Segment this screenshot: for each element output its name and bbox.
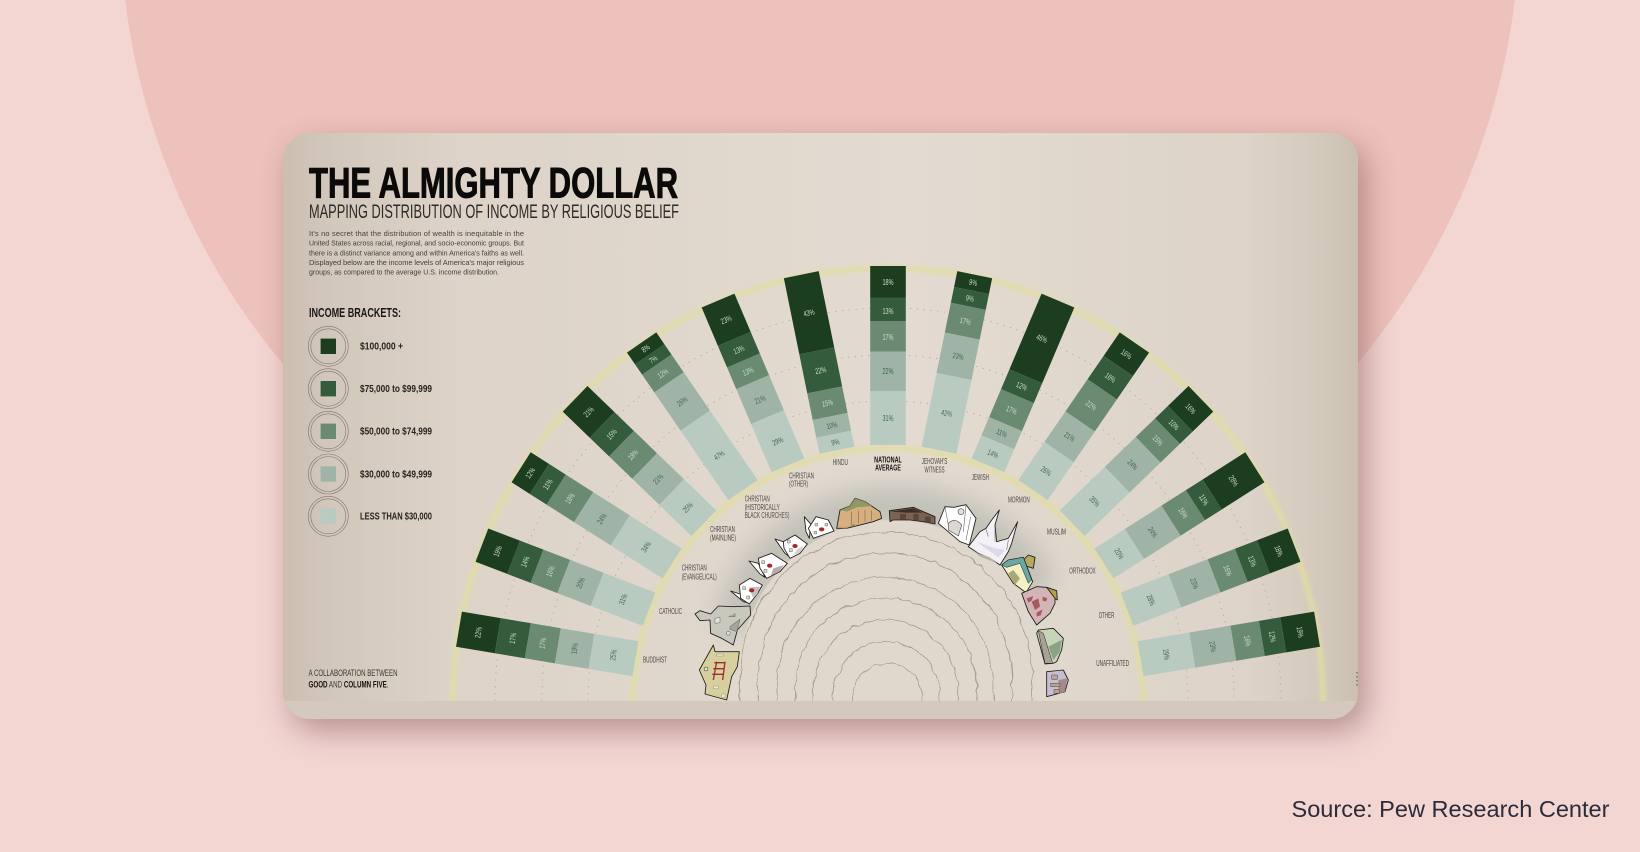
small edge marks	[1356, 672, 1358, 686]
bar: Catholic: 19%	[492, 545, 504, 558]
icon: mosque	[1002, 555, 1035, 593]
icon: dark stone temple	[889, 507, 935, 524]
bar: Christian (Mainline): 18%	[626, 448, 640, 462]
bar: Hindu	[784, 271, 854, 454]
bar: Muslim: 24%	[1125, 458, 1140, 472]
bar: Buddhist: 17%	[508, 632, 518, 644]
bar: Catholic: 20%	[574, 576, 587, 590]
source credit: Source: Pew Research Center	[1292, 796, 1610, 822]
intro text block: United States across racial, regional, and socio-economic groups. But	[309, 239, 524, 248]
legend item: $100,000 +: $100,000 +	[360, 342, 403, 353]
bar: Other: 16%	[1221, 564, 1234, 577]
bar: Jehovah's Witness: 9%	[965, 293, 975, 304]
bar: Christian (Mainline)	[563, 386, 716, 536]
bar: Christian (Evangelical)	[512, 452, 682, 578]
bar: Orthodox: 11%	[1197, 493, 1210, 507]
bar: Jehovah's Witness	[922, 271, 992, 454]
bar: Jewish: 46%	[1035, 332, 1049, 345]
buildings: left half	[695, 498, 935, 700]
credit text: GOOD AND COLUMN FIVE.	[308, 680, 388, 690]
bar: Hindu: 22%	[814, 365, 827, 376]
bar: Orthodox: 20%	[1112, 547, 1126, 561]
bar: Unaffiliated: 12%	[1267, 631, 1278, 643]
bar: Hindu: 15%	[821, 398, 834, 409]
bar: Muslim: 35%	[1087, 494, 1102, 509]
bar: Christian (Other)	[702, 294, 804, 472]
icon: Orthodox church	[1022, 587, 1057, 625]
wavy tree-ring lines	[740, 532, 1032, 706]
title: THE ALMIGHTY DOLLAR	[309, 160, 678, 208]
category labels: CHRISTIAN	[682, 564, 707, 573]
credit text: A COLLABORATION BETWEEN	[308, 668, 398, 678]
bar: Christian (Mainline): 15%	[605, 427, 619, 441]
bar: Jewish: 17%	[1005, 404, 1018, 417]
bar: Christian (Evangelical): 34%	[640, 540, 653, 554]
inner yellow arc	[633, 448, 1143, 703]
icon: Buddhist temple	[699, 645, 739, 700]
bar: National Average: 17%	[882, 333, 894, 342]
category labels: (MAINLINE)	[710, 533, 736, 542]
bar: Jehovah's Witness: 23%	[952, 351, 964, 362]
bar: National Average: 13%	[882, 307, 894, 316]
category labels: BUDDHIST	[643, 655, 667, 664]
bar: Jewish: 14%	[986, 448, 1000, 460]
bar: National Average: 22%	[882, 367, 894, 376]
bar: Muslim: 15%	[1151, 434, 1165, 448]
icon: house, Christian other	[804, 517, 834, 538]
category labels: (EVANGELICAL)	[682, 572, 717, 581]
dotted guide arcs	[495, 308, 1281, 701]
legend item: $30,000 to $49,999	[308, 454, 432, 494]
bar: Orthodox	[1094, 452, 1264, 578]
credit text	[308, 668, 398, 690]
bottom band	[283, 701, 1358, 719]
bar: Christian (Mainline): 21%	[651, 472, 665, 486]
bar: Christian (Historically Black Churches): 7%	[648, 354, 659, 366]
icon: other faith building	[1037, 628, 1063, 664]
legend item: $50,000 to $74,999	[308, 411, 432, 451]
bar: Christian (Historically Black Churches)	[627, 332, 758, 500]
bar: National Average: 18%	[882, 278, 894, 287]
bar: Catholic	[476, 528, 655, 626]
category labels: ORTHODOX	[1069, 567, 1096, 576]
bar: Mormon: 16%	[1119, 348, 1133, 361]
panel: infographic card	[283, 133, 1358, 719]
legend heading: INCOME BRACKETS:	[309, 305, 401, 320]
bar: Hindu: 10%	[826, 420, 838, 431]
grey halo behind buildings	[738, 506, 1031, 610]
bar: Buddhist: 19%	[570, 642, 580, 655]
bar: Hindu: 9%	[831, 437, 840, 448]
bar: Other: 28%	[1145, 593, 1157, 607]
category labels: CATHOLIC	[659, 607, 682, 616]
bar: Jehovah's Witness: 42%	[940, 408, 953, 419]
bar: Christian (Historically Black Churches): 12%	[656, 367, 670, 380]
bar: Other: 23%	[1188, 577, 1200, 590]
icon: Mormon temple	[968, 510, 1018, 565]
bar: Mormon: 16%	[1103, 371, 1117, 385]
bar: Hindu: 43%	[803, 308, 815, 319]
legend item: $100,000 +	[308, 326, 403, 366]
icon: unaffiliated house	[1047, 670, 1068, 697]
bar: National Average	[870, 266, 906, 445]
icon: house, Mainline	[749, 553, 787, 578]
bar: Orthodox: 16%	[1176, 506, 1190, 520]
bar: Christian (Historically Black Churches): 47%	[712, 449, 726, 462]
outer yellow arc	[453, 268, 1323, 703]
category labels: JEHOVAH'S	[922, 457, 947, 466]
bar: Jewish	[972, 294, 1074, 472]
intro text block: Displayed below are the income levels of America's major religious	[309, 258, 524, 267]
bar: Jehovah's Witness: 17%	[959, 316, 972, 327]
bar: Mormon	[1018, 332, 1149, 500]
bar: Mormon: 26%	[1039, 464, 1053, 478]
bar: Jehovah's Witness: 9%	[968, 278, 978, 288]
category labels: WITNESS	[924, 465, 944, 474]
legend item: $30,000 to $49,999: $30,000 to $49,999	[360, 469, 432, 480]
category labels: HINDU	[833, 458, 848, 467]
bar: Orthodox: 28%	[1227, 474, 1240, 488]
bar: Catholic: 14%	[519, 555, 532, 569]
bar: Christian (Evangelical): 12%	[524, 466, 537, 480]
bar: Buddhist: 17%	[538, 637, 548, 649]
bar: Mormon: 22%	[1084, 399, 1098, 412]
icon: Hindu temple	[837, 498, 882, 529]
bar: Muslim: 16%	[1183, 402, 1198, 416]
legend item: $75,000 to $99,999: $75,000 to $99,999	[360, 384, 432, 395]
category labels: (HISTORICALLY	[745, 503, 780, 512]
bar: Christian (Historically Black Churches): 26%	[675, 395, 689, 409]
category labels: NATIONAL	[874, 454, 902, 464]
category labels: MUSLIM	[1047, 528, 1066, 537]
bar: Christian (Other): 21%	[753, 394, 767, 406]
bar: Christian (Other): 13%	[741, 365, 755, 378]
bar: Christian (Historically Black Churches): 8%	[640, 343, 652, 355]
category labels: OTHER	[1099, 611, 1114, 620]
bar: Christian (Other): 23%	[719, 314, 733, 326]
icon: synagogue	[938, 505, 976, 545]
bar: Christian (Other): 29%	[771, 435, 785, 448]
bar: Muslim: 10%	[1167, 418, 1181, 432]
category labels: MORMON	[1008, 496, 1030, 505]
bar: Christian (Other): 13%	[732, 344, 746, 356]
bar: Catholic: 31%	[617, 593, 629, 606]
central disc	[740, 520, 1045, 705]
bar: Christian (Mainline): 21%	[582, 405, 596, 419]
bar: Unaffiliated: 23%	[1207, 641, 1218, 653]
bar: Catholic: 16%	[544, 565, 557, 578]
category labels	[643, 454, 1129, 668]
bar: Muslim	[1060, 386, 1213, 536]
bar: Buddhist: 25%	[608, 649, 619, 661]
intro text block	[309, 229, 524, 277]
bar: Jewish: 12%	[1015, 380, 1028, 393]
category labels: (OTHER)	[789, 480, 808, 489]
category labels: CHRISTIAN	[745, 495, 770, 504]
category labels: BLACK CHURCHES)	[745, 511, 790, 520]
legend item: less than $30,000: LESS THAN $30,000	[360, 512, 432, 523]
bar: Buddhist	[456, 612, 638, 676]
bar: Jewish: 11%	[995, 427, 1008, 440]
bar: Unaffiliated: 16%	[1242, 635, 1253, 647]
category labels: CHRISTIAN	[710, 525, 735, 534]
bar: National Average: 31%	[882, 414, 894, 423]
intro text block: It's no secret that the distribution of wealth is inequitable in the	[309, 229, 524, 238]
buildings: right half	[938, 505, 1068, 697]
icon: Catholic church	[695, 606, 751, 645]
intro text block: groups, as compared to the average U.S. income distribution.	[309, 268, 499, 277]
bar: Unaffiliated: 19%	[1295, 626, 1305, 638]
bar: Christian (Evangelical): 18%	[563, 491, 577, 506]
bar: Christian (Evangelical): 24%	[595, 512, 609, 526]
legend item: $75,000 to $99,999	[308, 369, 432, 409]
category labels: UNAFFILIATED	[1096, 659, 1129, 668]
legend item: less than $30,000	[308, 496, 432, 536]
bar: Christian (Mainline): 25%	[681, 501, 695, 515]
bar: Christian (Evangelical): 11%	[541, 477, 555, 491]
subtitle: MAPPING DISTRIBUTION OF INCOME BY RELIGIOUS BELIEF	[309, 201, 679, 223]
category labels: CHRISTIAN	[789, 471, 814, 480]
bar: Orthodox: 24%	[1146, 525, 1159, 540]
background circle	[120, 0, 1520, 615]
category labels: AVERAGE	[875, 463, 901, 473]
bar: Other: 18%	[1272, 544, 1285, 558]
intro text block: there is a distinct variance among and within America's faiths as well.	[309, 248, 524, 257]
legend: income brackets	[308, 305, 432, 536]
bar: Other	[1121, 528, 1300, 626]
bar: Mormon: 21%	[1062, 430, 1077, 444]
legend item: $50,000 to $74,999: $50,000 to $74,999	[360, 427, 432, 438]
bar: Unaffiliated	[1138, 612, 1320, 676]
bar: Other: 13%	[1246, 554, 1258, 568]
icon: house, Evangelical	[731, 578, 762, 604]
bar: Unaffiliated: 29%	[1161, 648, 1171, 661]
bar: Buddhist: 22%	[473, 626, 484, 639]
icon: house, Historically Black Churches	[775, 535, 807, 558]
category labels: JEWISH	[972, 473, 989, 482]
